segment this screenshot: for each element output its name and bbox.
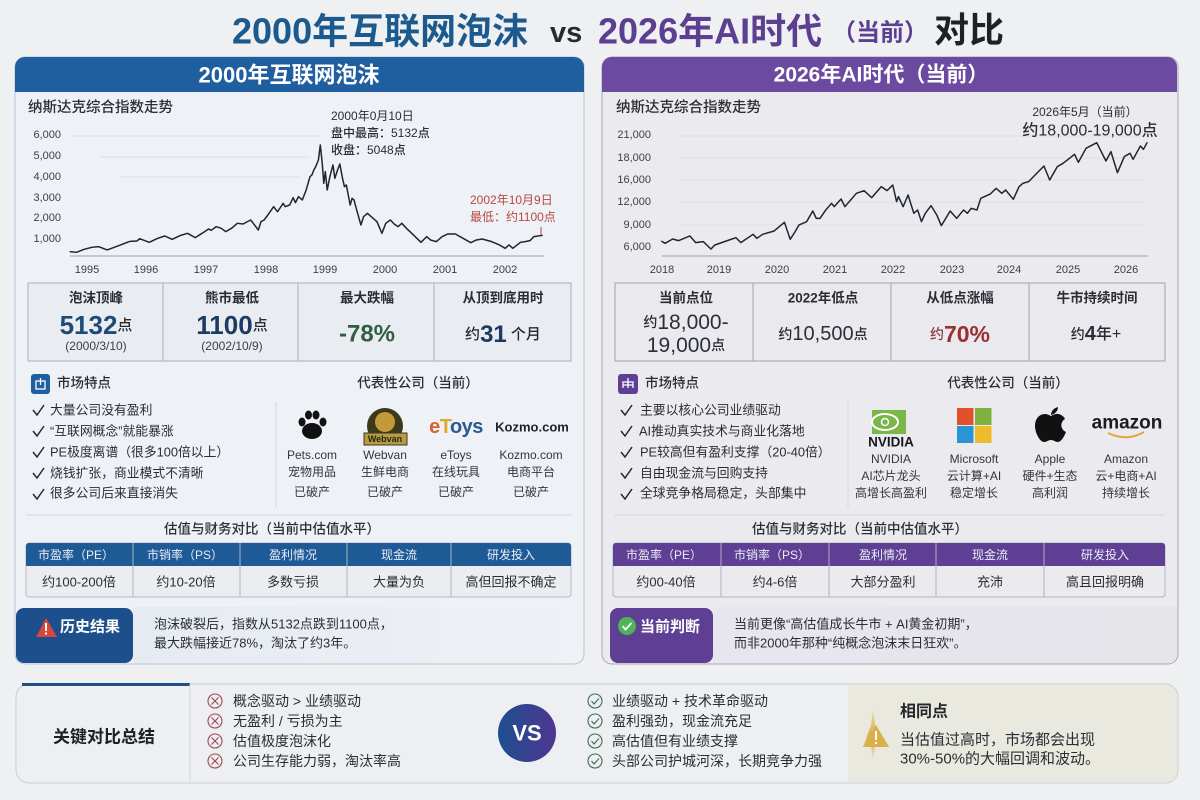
callout: historical result [16,607,583,663]
panel header: 2026年AI时代（当前） [774,64,988,86]
icon: green check [618,617,636,635]
valuation table: 研发投入 [1081,547,1129,562]
valuation table: 盈利情况 [859,548,907,562]
line chart: Nasdaq 1995-2002: 4,000 [33,171,61,183]
annotation: peak [331,109,430,157]
valuation table: 市销率（PS） [734,547,810,562]
line chart: Nasdaq 1995-2002: 5,000 [33,150,61,162]
stat: drawdown: 最大跌幅 [340,290,394,306]
callout: common point: 相同点 [900,702,948,720]
feature list [621,402,831,500]
feature list: AI推动真实技术与商业化落地 [639,424,805,438]
company: Webvan: Webvan [363,448,407,462]
valuation table: 充沛 [977,574,1003,590]
line chart: Nasdaq 2018-2026: 18,000 [617,152,651,164]
line chart: Nasdaq 2018-2026: 2024 [997,264,1021,276]
valuation table: 现金流 [972,547,1008,562]
stat: bull duration [1056,290,1138,345]
company: Pets.com: Pets.com [287,448,337,462]
panel header [602,57,1177,92]
stat: low [196,290,268,353]
company: Apple: 高利润 [1032,485,1068,500]
feature list: 自由现金流与回购支持 [640,466,768,480]
annotation: peak: 收盘：5048点 [331,142,406,157]
list: 2000 traits: 概念驱动 > 业绩驱动 [233,693,361,709]
company: eToys: 已破产 [438,484,474,499]
company: Microsoft: 稳定增长 [950,485,998,500]
company: Webvan: 已破产 [367,484,403,499]
annotation: current level: 约18,000-19,000点 [1022,122,1158,140]
stat: peak [60,290,132,353]
valuation table heading: 估值与财务对比（当前中估值水平） [752,520,968,536]
stat: 2022 low: 2022年低点 [788,290,859,306]
stat: bull duration: 牛市持续时间 [1056,290,1138,306]
valuation table: 市盈率（PE） [38,547,114,562]
valuation table: 高且回报明确 [1066,574,1144,590]
feature list: 烧钱扩张，商业模式不清晰 [50,466,204,480]
stat: 2022 low [778,290,868,345]
line chart: Nasdaq 1995-2002: 2000 [373,264,397,276]
company: Apple: Apple [1035,452,1066,466]
panel: key comparison summary [16,683,1178,783]
panel header: 2000年互联网泡沫 [199,62,379,88]
list: 2000 traits: 无盈利 / 亏损为主 [233,713,343,729]
callout: current judgement [610,607,1177,663]
company: Webvan: Webvan [368,434,402,444]
list: 2000 traits: 估值极度泡沫化 [233,733,331,749]
section icon: market features [618,374,638,394]
stat: current level [643,290,729,356]
valuation table: 大部分盈利 [850,574,916,590]
panel header [15,57,584,92]
company: Amazon: 云+电商+AI [1095,468,1157,483]
company: Amazon [1092,412,1162,500]
line chart: Nasdaq 2018-2026: 2022 [881,264,905,276]
company: NVIDIA: AI芯片龙头 [861,469,921,483]
callout: historical result: 泡沫破裂后，指数从5132点跌到1100点， [154,616,393,632]
feature list [33,402,229,500]
company: Amazon: amazon [1092,412,1162,434]
stat: peak: 泡沫顶峰 [69,290,123,306]
line chart: Nasdaq 2018-2026: 2023 [940,264,964,276]
list: 2000 traits [208,693,401,769]
valuation table: 高但回报不确定 [465,574,557,590]
annotation: current level [1022,104,1158,140]
company: Pets.com: 已破产 [294,484,330,499]
company: Webvan [361,408,409,499]
stat: current level: 当前点位 [659,290,713,306]
icon: warning [863,708,889,760]
company: Microsoft: Microsoft [950,452,999,466]
list: 2026 traits [588,693,822,769]
stat: drawdown [339,290,395,348]
section icon: market features [31,374,50,394]
line chart: Nasdaq 1995-2002: 3,000 [33,192,61,204]
valuation table: 约10-20倍 [156,574,216,590]
stat: peak: (2000/3/10) [65,339,127,353]
line chart: Nasdaq 2018-2026: 12,000 [617,196,651,208]
company: Kozmo.com: Kozmo.com [495,420,569,434]
valuation table [613,543,1165,597]
company: eToys: eToys [429,416,483,438]
stat: duration: 约31 个月 [465,320,541,348]
line chart: Nasdaq 1995-2002: 2,000 [33,212,61,224]
callout: common point [848,685,1177,782]
line chart: Nasdaq 2018-2026: 2020 [765,264,789,276]
line chart: Nasdaq 2018-2026: 9,000 [623,219,651,231]
line chart: Nasdaq 1995-2002: 1997 [194,264,218,276]
feature list: 主要以核心公司业绩驱动 [640,402,781,418]
company: Kozmo.com: 已破产 [513,484,549,499]
valuation table: 约100-200倍 [42,574,116,590]
callout: common point: 30%-50%的大幅回调和波动。 [900,750,1100,768]
feature list: “互联网概念”就能暴涨 [50,424,174,438]
annotation: peak: 盘中最高：5132点 [331,125,430,140]
stat: rise from low [926,290,994,347]
company: Microsoft [947,408,1001,500]
annotation: trough: 2002年10月9日 [470,193,553,207]
feature list: 全球竞争格局稳定，头部集中 [640,486,806,500]
valuation table: 现金流 [381,547,417,562]
line chart: Nasdaq 2018-2026: 6,000 [623,241,651,253]
company: Apple: 硬件+生态 [1022,469,1078,483]
summary heading cell [22,683,190,783]
line chart: Nasdaq 1995-2002: 1998 [254,264,278,276]
line chart: Nasdaq 2018-2026: 21,000 [617,129,651,141]
list: 2026 traits: 高估值但有业绩支撑 [612,733,738,749]
stat cards [28,283,571,361]
panel: 2000 dot-com bubble [15,57,584,664]
line chart: Nasdaq 2018-2026: 2018 [650,264,674,276]
callout: current judgement: 当前判断 [640,618,700,636]
feature list: 大量公司没有盈利 [50,402,152,418]
valuation table: 研发投入 [487,547,535,562]
company: Kozmo.com: Kozmo.com [499,448,563,462]
company: Webvan: 生鲜电商 [361,464,409,479]
list: 2026 traits: 头部公司护城河深，长期竞争力强 [612,753,822,769]
company: NVIDIA: NVIDIA [871,452,911,466]
heading: market features: 市场特点 [57,374,111,390]
heading: market features: 市场特点 [645,374,699,390]
line chart: Nasdaq 2018-2026: 2026 [1114,264,1138,276]
line chart: Nasdaq 2018-2026: 2021 [823,264,847,276]
company: Apple [1022,407,1078,500]
line chart: Nasdaq 2018-2026: 2019 [707,264,731,276]
company: eToys: eToys [440,448,472,462]
stat: low: 熊市最低 [205,290,259,306]
company: Amazon: Amazon [1104,452,1148,466]
valuation table: 约4-6倍 [753,574,797,590]
callout: current judgement: 当前更像“高估值成长牛市 + AI黄金初期”， [734,616,978,632]
line chart: Nasdaq 1995-2002: 1999 [313,264,337,276]
callout: historical result: 最大跌幅接近78%，淘汰了约3年。 [154,636,356,650]
stat: rise from low: 从低点涨幅 [926,290,994,306]
valuation table: 约00-40倍 [636,574,696,590]
list: 2026 traits: 盈利强劲，现金流充足 [612,713,752,729]
panel: 2026 AI era [602,57,1178,664]
line chart: Nasdaq 2018-2026: 2025 [1056,264,1080,276]
valuation table [26,543,571,597]
stat: current level: 19,000点 [647,334,725,356]
company: eToys: 在线玩具 [432,465,480,479]
line chart: Nasdaq 1995-2002: 1,000 [33,233,61,245]
title: 2000年互联网泡沫 [232,10,528,52]
chart heading: 纳斯达克综合指数走势 [616,98,761,116]
heading: representative companies: 代表性公司（当前） [357,374,479,390]
stat: rise from low: 约70% [930,321,990,347]
stat cards [615,283,1165,361]
VS badge [498,704,556,762]
callout: current judgement: 而非2000年那种“纯概念泡沫末日狂欢”。 [734,636,967,650]
stat: peak: 5132点 [60,310,132,340]
company: Pets.com: 宠物用品 [288,464,336,479]
summary heading cell: 关键对比总结 [53,726,155,746]
line chart: Nasdaq 2018-2026: 16,000 [617,174,651,186]
stat: low: (2002/10/9) [201,339,263,353]
line chart: Nasdaq 1995-2002: 6,000 [33,129,61,141]
valuation table: 市盈率（PE） [626,547,702,562]
company: Kozmo.com [495,420,569,499]
company: Pets.com [287,410,337,499]
valuation table: 盈利情况 [269,548,317,562]
chart heading: 纳斯达克综合指数走势 [28,98,173,116]
company: NVIDIA [855,410,927,500]
title: 2026年AI时代 [598,10,822,52]
stat: current level: 约18,000- [643,310,729,334]
company: NVIDIA: 高增长高盈利 [855,485,927,500]
line chart: Nasdaq 2018-2026 [617,129,1148,276]
feature list: 很多公司后来直接消失 [50,486,178,500]
stat: drawdown: -78% [339,320,395,348]
valuation table: 市销率（PS） [147,547,223,562]
line chart: Nasdaq 1995-2002: 2002 [493,264,517,276]
company: eToys [429,416,483,499]
company: Kozmo.com: 电商平台 [507,464,555,479]
list: 2000 traits: 公司生存能力弱，淘汰率高 [233,753,401,769]
VS badge: VS [512,720,542,746]
callout: common point: 当估值过高时，市场都会出现 [900,732,1095,748]
title: 对比 [934,12,1004,50]
feature list: PE较高但有盈利支撑（20-40倍） [640,444,831,460]
valuation table heading: 估值与财务对比（当前中估值水平） [164,520,380,536]
feature list: PE极度离谱（很多100倍以上） [50,444,229,460]
line chart: Nasdaq 1995-2002: 1996 [134,264,158,276]
stat: low: 1100点 [196,310,268,340]
callout: historical result: 历史结果 [60,618,120,636]
icon: warning [36,618,57,637]
company: Microsoft: 云计算+AI [947,468,1001,483]
stat: bull duration: 约4年+ [1071,323,1121,345]
line chart: Nasdaq 1995-2002: 2001 [433,264,457,276]
heading: representative companies: 代表性公司（当前） [947,374,1069,390]
annotation: peak: 2000年0月10日 [331,109,414,123]
line chart: Nasdaq 1995-2002 [33,129,544,276]
annotation: trough [470,193,556,235]
stat: duration: 从顶到底用时 [462,290,544,306]
valuation table: 多数亏损 [267,574,319,590]
title: （当前） [832,20,928,46]
title: vs [550,17,582,49]
stat: duration [462,290,544,348]
list: 2026 traits: 业绩驱动 + 技术革命驱动 [612,693,768,709]
annotation: current level: 2026年5月（当前） [1032,104,1138,119]
stat: 2022 low: 约10,500点 [778,323,868,345]
line chart: Nasdaq 1995-2002: 1995 [75,264,99,276]
title [232,10,1004,52]
company: Amazon: 持续增长 [1102,485,1150,500]
annotation: trough: 最低：约1100点 [470,209,556,224]
valuation table: 大量为负 [373,574,425,590]
company: NVIDIA: NVIDIA [868,434,914,450]
